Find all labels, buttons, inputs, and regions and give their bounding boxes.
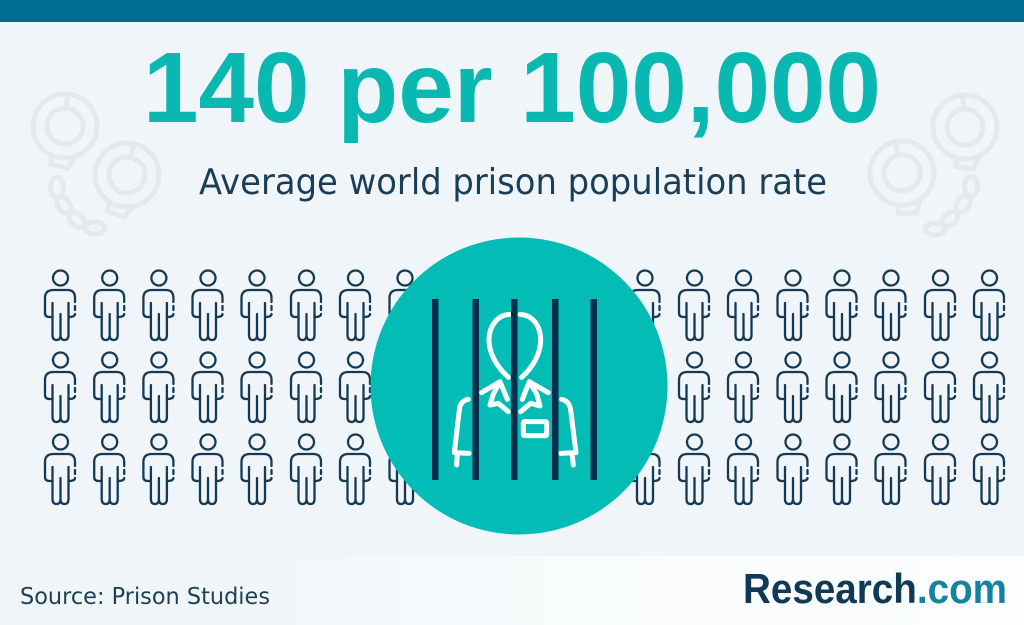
subtitle: Average world prison population rate — [199, 162, 827, 203]
icon: prisoner — [454, 314, 576, 465]
top bar — [0, 0, 1024, 22]
prison bars — [432, 299, 597, 480]
teal circle — [370, 238, 668, 534]
title: 140 per 100,000 — [143, 32, 881, 144]
icon: handcuffs right — [864, 93, 1000, 235]
footer background — [215, 556, 1024, 625]
icon: handcuffs left — [30, 92, 165, 234]
source: Source: Prison Studies — [20, 584, 270, 610]
logo: Research.com — [743, 565, 1007, 612]
people grid — [45, 270, 1004, 504]
